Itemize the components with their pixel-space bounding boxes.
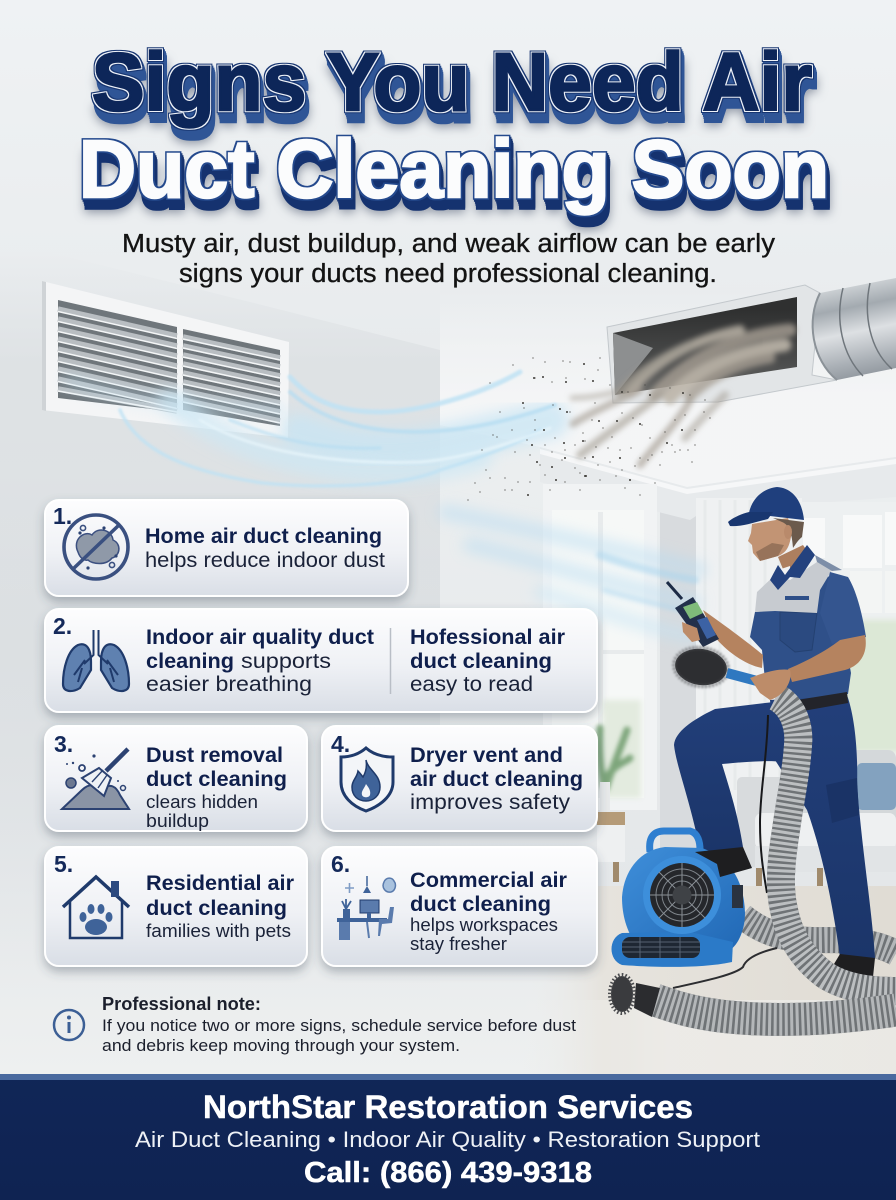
- card 4 text: air duct cleaning: [410, 767, 583, 791]
- shirt yoke: [755, 562, 832, 613]
- card 2 left text: cleaning: [146, 649, 234, 673]
- card 6 text: Commercial air: [410, 868, 568, 892]
- brush handle: [727, 673, 757, 681]
- subtitle: [122, 230, 775, 288]
- card 1 text: [145, 524, 385, 572]
- nozzle bristles: [611, 976, 633, 1012]
- shirt pocket: [780, 612, 817, 652]
- card 2 left text: [146, 625, 374, 696]
- card 3 text: [146, 743, 287, 831]
- number 6: 6.: [331, 851, 350, 877]
- phone number: Call: (866) 439-9318: [304, 1157, 592, 1189]
- icon: house with paw: [63, 877, 129, 938]
- icon: shield with flame: [341, 748, 393, 811]
- services line: Air Duct Cleaning • Indoor Air Quality • Restoration Support: [135, 1127, 761, 1152]
- icon: office desk: [337, 876, 395, 940]
- larger dust specks: [523, 364, 683, 495]
- note text: Professional note:: [102, 994, 261, 1014]
- card 2 left text: Indoor air quality duct: [146, 625, 374, 649]
- title line 2: Duct Cleaning Soon: [79, 124, 829, 215]
- card 2: indoor air quality and professional: [45, 609, 597, 712]
- card 5 text: duct cleaning: [146, 896, 287, 920]
- card 3 text: buildup: [146, 811, 209, 831]
- footer band: [0, 1074, 896, 1200]
- number 2: 2.: [53, 613, 72, 639]
- card 6: commercial: [322, 847, 597, 966]
- hair: [773, 518, 804, 548]
- card 6 text: helps workspaces: [410, 915, 558, 935]
- technician upper body: [667, 487, 866, 711]
- fan grille: [650, 863, 714, 927]
- duct frame: [607, 285, 837, 403]
- raised boot: [695, 847, 752, 877]
- card 4 text: improves safety: [410, 790, 570, 814]
- card 6 text: [410, 868, 568, 954]
- bent leg: [674, 700, 792, 851]
- card 2 right text: easy to read: [410, 672, 533, 696]
- title: [79, 37, 829, 215]
- number 5: 5.: [54, 851, 73, 877]
- fan ring: [643, 856, 721, 934]
- subtitle: Musty air, dust buildup, and weak airflow can be early: [122, 230, 775, 258]
- note text: and debris keep moving through your system.: [102, 1036, 460, 1055]
- blower body: [622, 847, 745, 950]
- blower base: [612, 932, 733, 967]
- card 2 left text: easier breathing: [146, 672, 312, 696]
- sofa: [737, 750, 896, 886]
- number 1: 1.: [53, 503, 72, 529]
- floor cable: [673, 948, 777, 988]
- company name: NorthStar Restoration Services: [203, 1089, 693, 1125]
- chest logo: [785, 596, 809, 600]
- duct opening: [613, 297, 797, 395]
- raised forearm: [703, 610, 763, 668]
- shoulder stripe: [815, 555, 842, 571]
- number 4: 4.: [331, 731, 350, 757]
- white tee: [778, 566, 790, 582]
- brush bristles: [672, 644, 730, 690]
- base vent: [622, 937, 700, 958]
- card 1 text: helps reduce indoor dust: [145, 548, 385, 572]
- icon: broom and dust pile: [62, 749, 129, 809]
- card 2 left text: supports: [241, 649, 331, 673]
- hand gripping brush: [750, 635, 866, 700]
- card 5: residential: [45, 847, 307, 966]
- side table and plant: [597, 728, 630, 882]
- fine dust: [468, 358, 710, 500]
- standing leg: [770, 695, 875, 961]
- standing boot: [828, 954, 875, 978]
- number 3: 3.: [54, 731, 73, 757]
- sleeve: [820, 572, 866, 644]
- card 5 text: Residential air: [146, 871, 295, 895]
- belt: [797, 692, 848, 711]
- floor: [520, 886, 896, 1076]
- card 4: dryer vent: [322, 726, 597, 831]
- blower handle: [650, 831, 700, 852]
- card 5 text: families with pets: [146, 921, 291, 941]
- card 5 text: [146, 871, 295, 941]
- blue airflow streams: [70, 372, 700, 636]
- icon: no dust: [64, 515, 128, 579]
- note text: If you notice two or more signs, schedule service before dust: [102, 1016, 576, 1035]
- neck: [778, 545, 810, 574]
- collar: [770, 545, 815, 590]
- cap crown: [749, 487, 804, 520]
- fingers holding meter: [682, 622, 700, 642]
- card 6 text: duct cleaning: [410, 892, 551, 916]
- round metal duct: [813, 278, 896, 380]
- hose behind technician: [742, 916, 896, 953]
- card 4 text: [410, 743, 583, 814]
- card 1 text: Home air duct cleaning: [145, 524, 382, 548]
- icon: info: [54, 1010, 84, 1040]
- card 2 right text: Hofessional air: [410, 625, 566, 649]
- card 3 text: clears hidden: [146, 792, 258, 812]
- professional note: [54, 994, 576, 1055]
- title line 1: Signs You Need Air: [92, 37, 812, 128]
- icon: lungs: [63, 630, 129, 691]
- card 6 text: stay fresher: [410, 934, 507, 954]
- cap brim: [728, 512, 773, 526]
- card 3 text: Dust removal: [146, 743, 283, 767]
- meter device: [667, 582, 719, 647]
- dust plume and particles: [468, 330, 790, 500]
- card 3 text: duct cleaning: [146, 767, 287, 791]
- card 2 right text: duct cleaning: [410, 649, 552, 673]
- air blower machine: [612, 831, 752, 967]
- main corrugated hose: [776, 697, 896, 991]
- air vent grille: [42, 281, 289, 438]
- face: [748, 518, 792, 561]
- card 4 text: Dryer vent and: [410, 743, 563, 767]
- subtitle: signs your ducts need professional cleaning.: [179, 260, 717, 288]
- ear: [784, 525, 792, 539]
- blower controls: [732, 885, 743, 908]
- note text: [102, 994, 576, 1055]
- torso shirt: [750, 575, 851, 700]
- stubble: [756, 543, 784, 561]
- nozzle collar: [634, 983, 660, 1017]
- dirty duct outlet: [607, 278, 896, 403]
- floor hose with nozzle: [610, 975, 896, 1019]
- card 1: home air duct cleaning: [45, 500, 408, 596]
- power cable: [760, 715, 768, 893]
- card 3: dust removal: [45, 726, 307, 831]
- card 2 right text: [410, 625, 566, 696]
